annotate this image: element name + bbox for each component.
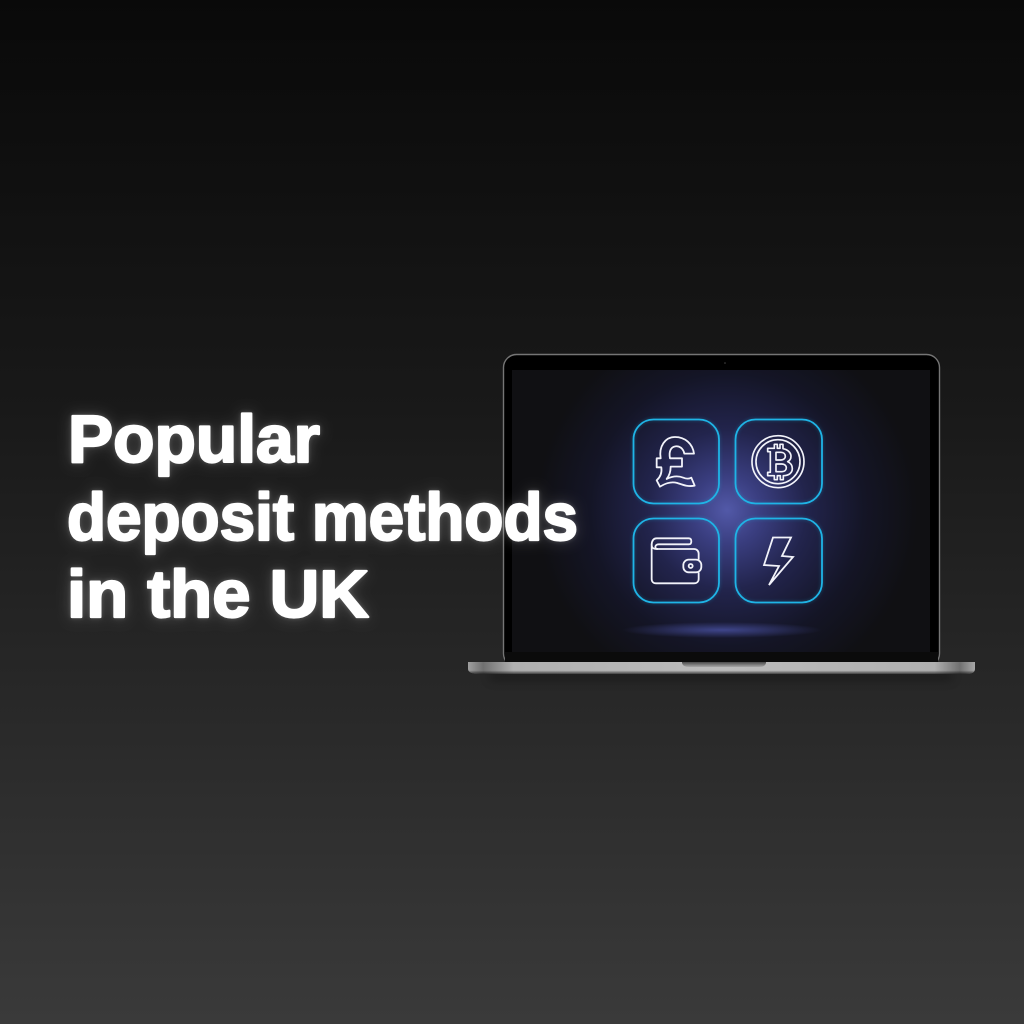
tile: lightning (736, 518, 822, 602)
icon: bitcoin coin (752, 436, 804, 488)
title: in the UK (67, 557, 369, 632)
title: deposit methods (67, 480, 578, 555)
tile: bitcoin (736, 420, 822, 504)
icon: wallet (652, 538, 701, 583)
notch (682, 662, 766, 667)
title: Popular (68, 402, 320, 477)
laptop (468, 354, 975, 680)
bottom bezel (505, 652, 938, 662)
icon: lightning bolt (764, 538, 793, 585)
camera (724, 362, 726, 364)
tile glow (634, 420, 822, 602)
laptop lid (504, 354, 940, 666)
laptop shadow (490, 673, 952, 680)
title (67, 402, 578, 632)
screen floor glow (622, 622, 822, 638)
screen (512, 370, 930, 652)
laptop base (468, 662, 975, 674)
tile: wallet (634, 518, 719, 602)
tile: pound (634, 420, 719, 504)
icon: pound sign (657, 437, 695, 487)
icon grid (634, 420, 822, 602)
